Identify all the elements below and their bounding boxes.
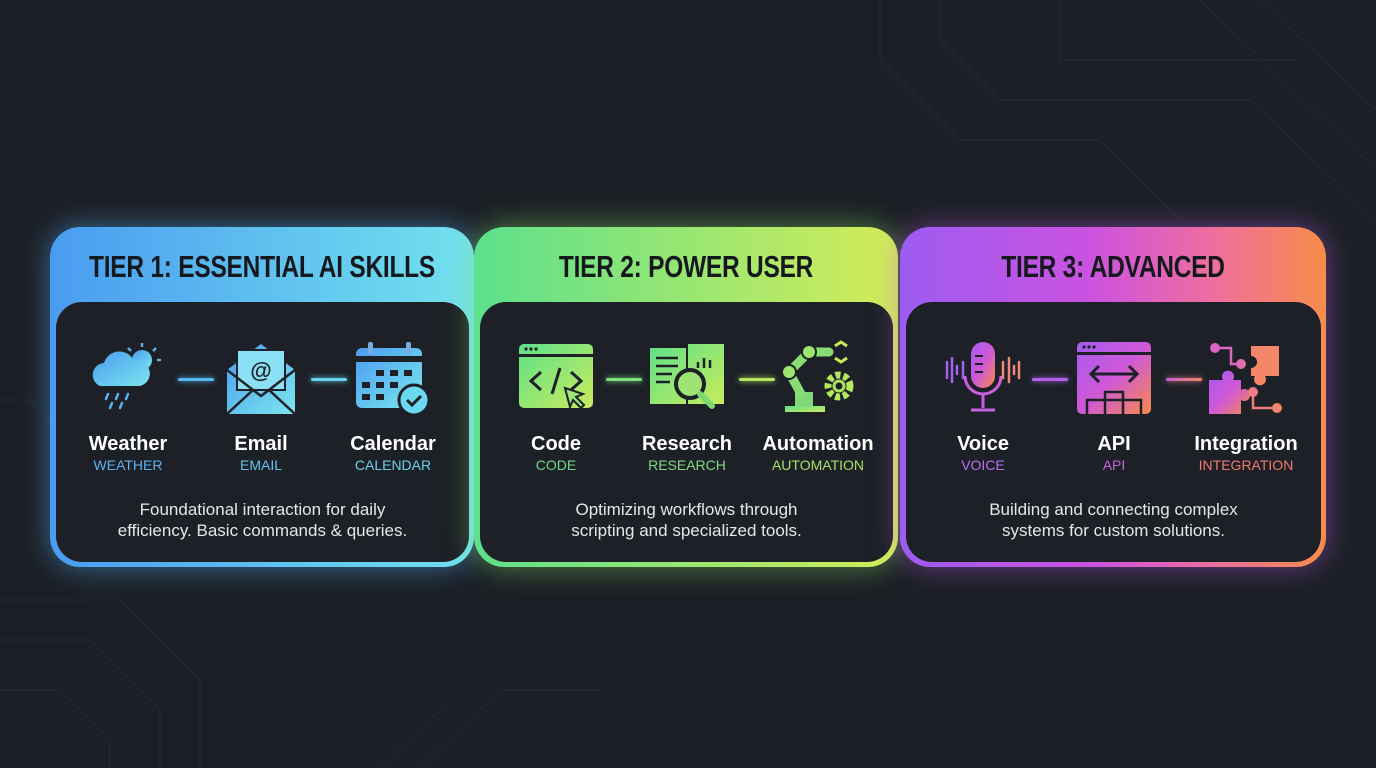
- text: tier 2 description: [571, 500, 802, 540]
- item: integration: [1194, 343, 1298, 473]
- panel: tier 3: [900, 227, 1326, 567]
- item: api: [1077, 342, 1151, 473]
- inner box: tier 1: [56, 302, 469, 562]
- item: research: [642, 344, 732, 473]
- item: research: RESEARCH: [648, 457, 726, 473]
- item: calendar: [350, 342, 436, 473]
- item: email: Email: [234, 433, 288, 455]
- item: calendar: CALENDAR: [355, 457, 431, 473]
- text: tier 1 description: Foundational interaction for daily: [140, 500, 385, 519]
- item: automation: [762, 340, 874, 473]
- item: automation: AUTOMATION: [772, 457, 864, 473]
- text: tier 1 description: [118, 500, 407, 540]
- arrow: connector: [178, 378, 214, 381]
- item: code: [519, 344, 593, 473]
- arrow: connector: [606, 378, 642, 381]
- heading: tier 2: TIER 2: POWER USER: [559, 249, 813, 284]
- inner box: tier 3: [906, 302, 1321, 562]
- item: email: [227, 344, 295, 473]
- item: automation: Automation: [762, 433, 874, 455]
- item: api: API: [1097, 433, 1131, 455]
- arrow: connector: [311, 378, 347, 381]
- heading: tier 1: TIER 1: ESSENTIAL AI SKILLS: [89, 249, 435, 284]
- panel: tier 1: [50, 227, 474, 567]
- item: code: Code: [531, 433, 581, 455]
- text: tier 2 description: scripting and specialized tools.: [571, 521, 802, 540]
- item: email: EMAIL: [240, 457, 282, 473]
- item: code: CODE: [536, 457, 576, 473]
- text: tier 3 description: [989, 500, 1238, 540]
- item: weather: WEATHER: [94, 457, 162, 473]
- arrow: connector: [1166, 378, 1202, 381]
- item: weather: Weather: [89, 433, 167, 455]
- item: voice: VOICE: [961, 457, 1005, 473]
- text: tier 2 description: Optimizing workflows through: [575, 500, 798, 519]
- heading: tier 3: TIER 3: ADVANCED: [1001, 249, 1225, 284]
- item: voice: [946, 342, 1020, 473]
- item: weather: [88, 343, 167, 473]
- item: api: API: [1103, 457, 1125, 473]
- item: voice: Voice: [957, 433, 1009, 455]
- inner box: tier 2: [480, 302, 893, 562]
- text: tier 3 description: Building and connecting complex: [989, 500, 1238, 519]
- item: email: @: [250, 358, 272, 383]
- item: integration: INTEGRATION: [1199, 457, 1293, 473]
- item: research: Research: [642, 433, 732, 455]
- item: integration: Integration: [1194, 433, 1298, 455]
- text: tier 1 description: efficiency. Basic commands & queries.: [118, 521, 407, 540]
- panel: tier 2: [474, 227, 898, 567]
- arrow: connector: [739, 378, 775, 381]
- item: calendar: Calendar: [350, 433, 436, 455]
- text: tier 3 description: systems for custom solutions.: [1002, 521, 1225, 540]
- arrow: connector: [1032, 378, 1068, 381]
